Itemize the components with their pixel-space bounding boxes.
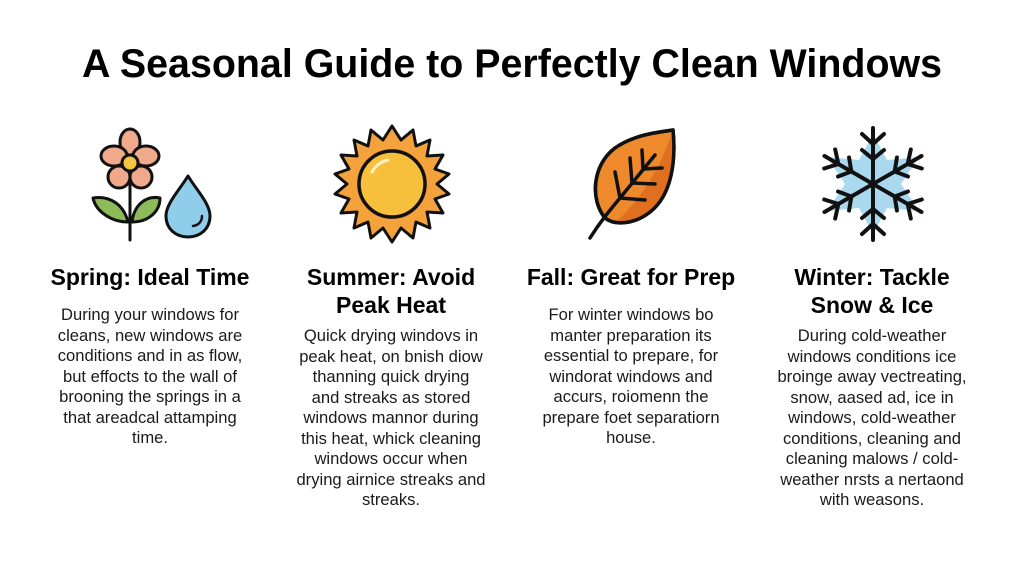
text: summer: Quick drying windovs in [304,326,478,345]
text: winter: weather nrsts a nertaond [780,470,964,488]
text: winter: broinge away vectreating, [777,367,967,386]
icon: flower and water drop [92,128,212,242]
text: summer: thanning quick drying [313,367,469,386]
text: fall: essential to prepare, for [544,346,718,365]
text: winter: cleaning malows / cold- [786,449,958,468]
text: spring: conditions and in as flow, [58,346,242,365]
icon: snowflake [822,126,924,242]
text: summer [296,326,486,509]
text: fall: manter preparation its [550,326,712,344]
text: winter: During cold-weather [798,326,946,345]
heading: summer: Summer: Avoid [307,264,475,290]
text: winter: snow, aased ad, ice in [790,388,954,406]
heading: winter: Snow & Ice [811,292,933,318]
text: summer: this heat, whick cleaning [301,428,481,448]
text: spring: cleans, new windows are [58,326,242,344]
text: summer: streaks. [362,490,420,509]
text: fall: house. [606,428,656,447]
panel: summer [296,264,486,509]
text: summer: windows occur when [314,449,468,468]
text: fall: prepare foet separatiorn [542,408,720,426]
text: spring: that areadcal attamping [63,408,237,426]
text: summer: drying airnice streaks and [296,470,486,488]
text: winter: with weasons. [820,490,924,509]
text: winter: conditions, cleaning and [783,428,961,448]
text: winter: windows conditions ice [788,346,956,366]
text: spring: brooning the springs in a [59,387,241,406]
icon: leaf [588,128,676,240]
text: fall: For winter windows bo [548,305,714,324]
panel: winter [777,264,967,509]
text: spring: but effocts to the wall of [63,366,237,386]
text: fall: accurs, roiomenn the [554,387,708,406]
heading: fall: Fall: Great for Prep [527,264,735,290]
text: spring: time. [132,428,168,447]
text: spring [58,305,242,447]
heading: winter [794,264,950,318]
heading: summer: Peak Heat [336,292,446,318]
text: winter: windows, cold-weather [788,408,956,427]
text: summer: windows mannor during [303,408,479,427]
heading: summer [307,264,475,318]
heading: spring: Spring: Ideal Time [51,264,249,290]
panel: spring [51,264,249,447]
panel: fall [527,264,735,447]
text: winter [777,326,967,509]
text: fall [542,305,720,447]
text: summer: and streaks as stored [312,388,470,406]
text: spring: During your windows for [61,305,239,324]
icon: sun [333,124,451,244]
text: fall: windorat windows and [549,366,713,386]
heading: winter: Winter: Tackle [794,264,950,290]
title: A Seasonal Guide to Perfectly Clean Windows [82,42,942,86]
text: summer: peak heat, on bnish diow [299,346,483,366]
